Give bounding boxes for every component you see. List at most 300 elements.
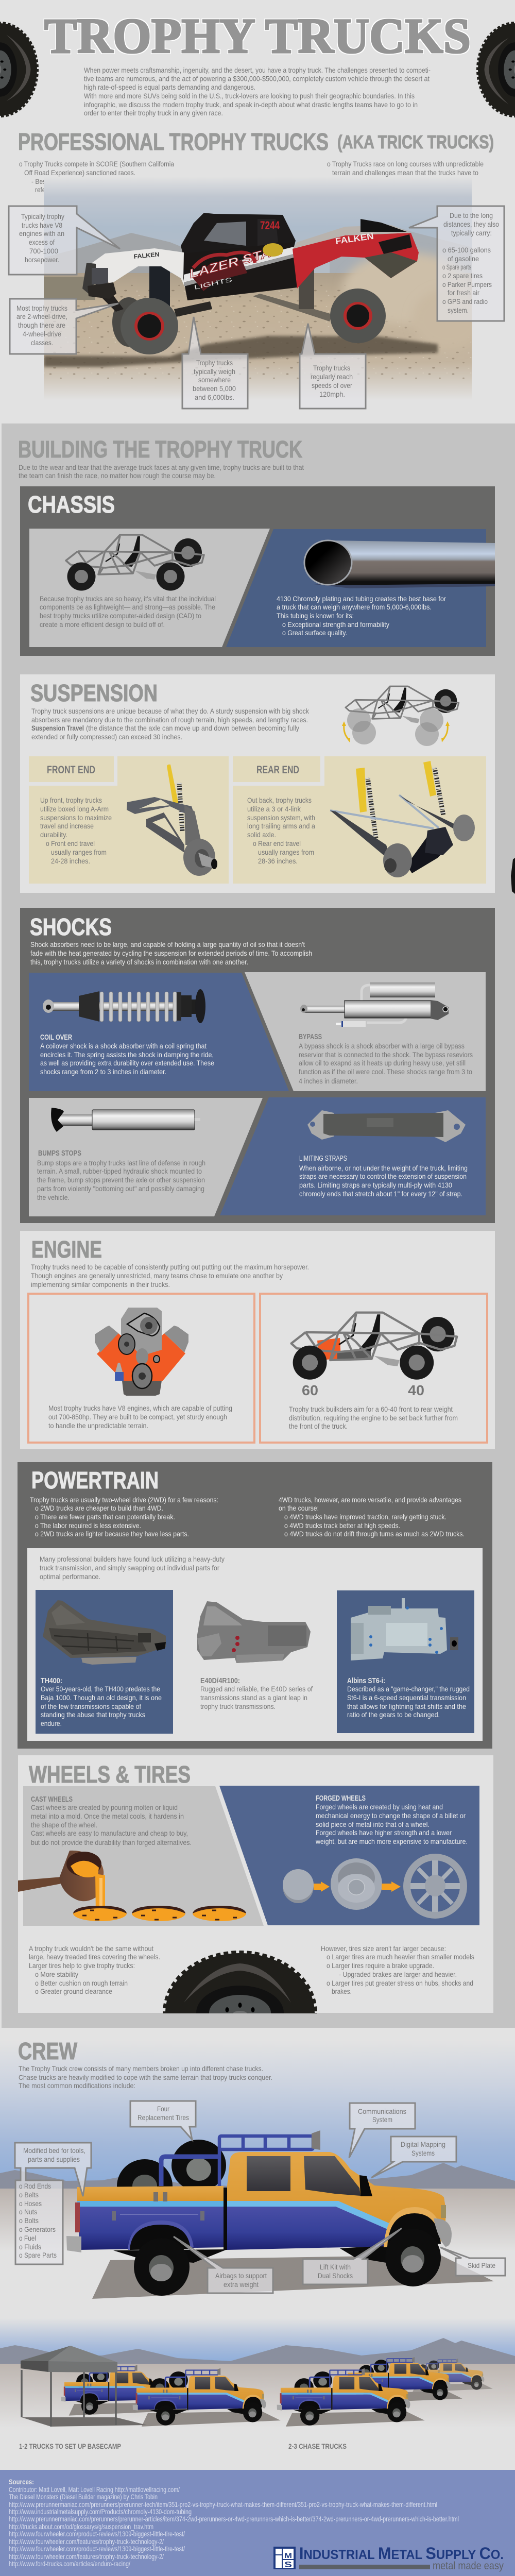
heading: suspension: SUSPENSION — [30, 680, 158, 706]
text: coil over: COIL OVER — [40, 1033, 72, 1042]
text: tubing — [277, 595, 446, 637]
text: sources: http://www.fourwheeler.com/features/trophy-truck-technology-2/ — [9, 2552, 164, 2561]
callout: lift kit — [303, 2228, 402, 2284]
heading: chassis: CHASSIS — [28, 491, 115, 518]
callout: airbags: extra weight — [224, 2280, 259, 2289]
text: albins: St6-I is a 6-speed sequential transmission — [347, 1693, 466, 1702]
text: intro — [84, 66, 431, 117]
text: engine intro: implementing similar components in their trucks. — [31, 1280, 170, 1289]
callout: modified bed: o Belts — [19, 2191, 39, 2199]
icon: e40d transmission — [197, 1601, 311, 1663]
callout: engine: engines with an — [19, 229, 64, 238]
text: bump stops: BUMPS STOPS — [38, 1149, 81, 1158]
text: sources: http://www.ford-trucks.com/articles/enduro-racing/ — [9, 2560, 130, 2568]
text: tires right: - Upgraded brakes are larger and heavier. — [339, 1970, 457, 1978]
icon: rear suspension — [330, 761, 475, 877]
text: crew intro: The most common modifications include: — [19, 2081, 135, 2090]
text: 2wd: o 2WD trucks are cheaper to build than 4WD. — [35, 1504, 163, 1512]
panel: wheels and tires — [18, 1755, 493, 2013]
icon: buggy with suspension travel — [342, 686, 459, 746]
card: th400 — [36, 1590, 173, 1734]
text: tires left: o More stability — [35, 1970, 78, 1978]
text: bypass: A bypass shock is a shock absorber with a large oil bypass — [299, 1042, 465, 1050]
text: sources: Contributor: Matt Lovell, Matt Lovell Racing http://mattlovellracing.com/ — [9, 2485, 180, 2494]
text: shocks intro — [30, 940, 312, 966]
text: forged wheels: mechanical energy to change the shape of a billet or — [316, 1811, 466, 1820]
icon: buggy with engine — [291, 1313, 457, 1380]
icon: right tire — [478, 23, 515, 116]
text: th400: Baja 1000. Though an old design, it is one — [41, 1693, 162, 1702]
callout: long distance supplies: system. — [448, 306, 469, 314]
logo: industrial metal supply: metal made easy — [433, 2560, 504, 2572]
text: th400: of the few transmissions capable of — [41, 1702, 141, 1710]
text: rear end: solid axle. — [247, 831, 276, 839]
text: tubing: o Exceptional strength and formability — [282, 620, 389, 629]
text: 2wd: o The labor required is less extensive. — [35, 1521, 141, 1530]
text: sources: Sources: — [9, 2478, 34, 2486]
callout: airbags — [174, 2236, 273, 2293]
callout: weight: somewhere — [198, 376, 231, 384]
heading: shocks: SHOCKS — [30, 913, 112, 940]
callout: modified bed — [15, 2143, 91, 2264]
text: shocks intro: Shock absorbers need to be large, and capable of holding a large quantity of oil so that it doesn't — [30, 940, 305, 948]
card: limiting straps — [220, 1097, 486, 1215]
text: tires left: Larger tires help to give trophy trucks: — [29, 1961, 135, 1970]
callout: digital mapping — [371, 2137, 456, 2178]
text: cast wheels: the shape of the wheel. — [31, 1821, 97, 1829]
text: 4wd: o 4WD trucks do not drift through turns as much as 2WD trucks. — [284, 1530, 465, 1538]
text: front end — [40, 796, 112, 865]
text: left bullets: - Best in the Desert Off-Road Racing Association — [31, 177, 166, 185]
callout: modified bed: parts and supplies — [28, 2155, 80, 2163]
text: design — [40, 595, 216, 629]
callout: drive — [10, 299, 118, 354]
text: tubing: 4130 Chromoly plating and tubing creates the best base for — [277, 595, 446, 603]
logo: industrial metal supply: M — [284, 2551, 292, 2560]
text: design: Because trophy trucks are so heavy, it's vital that the individual — [40, 595, 216, 603]
text: suspension intro — [31, 707, 310, 741]
callout: speed: speeds of over — [312, 381, 352, 389]
card: coil over — [29, 973, 289, 1091]
callout: long distance supplies: Due to the long — [450, 211, 493, 219]
icon: limiting strap — [307, 1110, 466, 1142]
text: forged wheels: weight, but are much more expensive to manufacture. — [315, 1837, 468, 1845]
text: bypass: function as if the oil were cool. These shocks range from 3 to — [299, 1067, 472, 1076]
callout: lift kit: Lift Kit with — [320, 2263, 351, 2271]
icon: coil over shock — [43, 989, 205, 1023]
text: 4wd: 4WD trucks, however, are more versatile, and provide advantages — [279, 1496, 461, 1504]
text: suspension intro: Trophy truck suspensions are unique because of what they do. A sturdy suspension with big shock — [31, 707, 310, 715]
text: sources: http://www.fourwheeler.com/product-reviews/1309-biggest-little-tire-test/ — [9, 2545, 185, 2553]
illustration: basecamp truck — [133, 2368, 281, 2427]
text: bump stops: terrain. A small, rubber-tipped hydraulic shock mounted to — [37, 1167, 202, 1175]
text: albins: Albins ST6-i: — [347, 1676, 385, 1685]
illustration: basecamp tent — [21, 2346, 147, 2427]
illustration: basecamp truck behind tent — [61, 2365, 190, 2416]
callout: drive: Most trophy trucks — [16, 304, 67, 312]
card: forged wheels — [219, 1786, 479, 1925]
text: bump stops — [37, 1149, 205, 1201]
text: weight distribution: distribution, requiring the engine to be set back further from — [289, 1414, 458, 1422]
callout: long distance supplies: o Parker Pumpers — [442, 280, 492, 289]
card: v8 engine — [28, 1294, 254, 1443]
header: title and intro — [0, 8, 515, 117]
callout: airbags: Airbags to support — [215, 2272, 267, 2280]
text: shocks intro: this, trophy trucks utilize a variety of shocks in combination with one another. — [30, 958, 248, 966]
text: intro: When power meets craftsmanship, ingenuity, and the desert, you have a trophy truck. The challenges presented to competi- — [84, 66, 431, 74]
text: cast wheels: CAST WHEELS — [31, 1795, 73, 1804]
icon: wheel molds — [73, 1906, 246, 1921]
callout: long distance supplies: typically carry: — [451, 229, 492, 237]
callout: drive: classes. — [31, 338, 53, 347]
text: right bullets: o Trophy Trucks race on long courses with unpredictable — [327, 160, 484, 168]
text: tires left — [29, 1944, 160, 1995]
text: bump stops: the vehicle. — [37, 1193, 70, 1201]
label: 60: 60 — [302, 1382, 318, 1398]
text: bypass: BYPASS — [299, 1032, 322, 1041]
text: v8 engine: to handle the unpredictable terrain. — [48, 1421, 148, 1430]
text: front end: suspensions to maximize — [40, 814, 112, 822]
panel: powertrain — [18, 1462, 492, 1749]
text: rear end — [247, 796, 315, 865]
heading: powertrain: POWERTRAIN — [31, 1467, 159, 1494]
heading: front end: FRONT END — [47, 764, 95, 776]
text: bypass: allow oil to exapnd as it heats up during heavy use, yet still — [299, 1059, 466, 1067]
text: forged wheels: Forged wheels are created by using heat and — [316, 1803, 443, 1811]
text: right bullets: built to stand up to any challenge. — [332, 177, 428, 185]
text: shocks intro: fade with the heat generated by cycling the suspension for extended periods of time. To accomplish — [30, 949, 312, 957]
icon: half tire — [163, 1951, 317, 2013]
callout: long distance supplies: distances, they also — [443, 220, 499, 228]
text: v8 engine — [48, 1404, 232, 1430]
heading: building the trophy truck: the team can finish the race, no matter how rough the course may be. — [19, 471, 216, 480]
text: forged wheels: Forged wheels have higher strength and a lower — [316, 1828, 452, 1837]
text: intro: high rate-of-speed is equal parts demanding and dangerous. — [84, 83, 255, 91]
card: e40d — [197, 1601, 313, 1710]
illustration: chase truck near — [277, 2368, 425, 2427]
text: 4wd: o 4WD trucks have improved traction, rarely getting stuck. — [284, 1513, 447, 1521]
icon: bump stop — [51, 1108, 200, 1132]
text: tubing: o Great surface quality. — [282, 629, 347, 637]
text: left bullets: Off Road Experience) sanctioned races. — [24, 168, 135, 177]
callout: engine: excess of — [29, 238, 55, 246]
text: cast wheels: Cast wheels are easy to manufacture and cheap to buy, — [31, 1829, 188, 1837]
text: crew intro: Chase trucks are heavily modified to cope with the same terrain that tropy trucks conquer. — [19, 2073, 272, 2081]
callout: digital mapping: Systems — [411, 2149, 435, 2157]
callout: skid plate — [440, 2247, 505, 2276]
text: rear end: 28-36 inches. — [258, 857, 298, 865]
text: th400: TH400: — [41, 1676, 62, 1685]
text: engine intro — [31, 1263, 309, 1289]
text: sources — [9, 2478, 459, 2568]
heading: building the trophy truck: BUILDING THE TROPHY TRUCK — [18, 436, 302, 463]
text: weight distribution: the front of the truck. — [289, 1422, 348, 1430]
heading: professional trophy trucks: PROFESSIONAL TROPHY TRUCKS — [18, 128, 329, 155]
callout: modified bed: o Hoses — [19, 2199, 42, 2208]
text: albins: ratio of the gears to be changed. — [347, 1710, 440, 1719]
card: albins — [337, 1590, 474, 1733]
text: suspension intro: absorbers are mandatory due to the combination of rough terrain, high speeds, and lengthy races. — [31, 716, 308, 724]
text: th400: standing the abuse that trophy trucks — [41, 1710, 145, 1719]
icon: left tire — [0, 23, 37, 116]
text: rear end: utilize a 3 or 4-link — [247, 805, 301, 813]
text: right bullets: terrain and challenges mean that the trucks have to — [332, 168, 478, 177]
callout: modified bed: o Fuel — [19, 2234, 36, 2242]
logo: industrial metal supply — [273, 2544, 504, 2572]
text: rear end: o Rear end travel — [253, 839, 301, 848]
text: albins: Described as a "game-changer," the rugged — [347, 1685, 470, 1693]
text: right bullets — [327, 160, 484, 185]
text: intro: tive teams are numerous, and the act of powering a $300,000-$500,000, completely custom vehicle through the desert at — [84, 74, 430, 82]
text: 2wd: Trophy trucks are usually two-wheel drive (2WD) for a few reasons: — [30, 1496, 218, 1504]
icon: front suspension — [127, 765, 217, 876]
panel: shocks — [20, 908, 495, 1223]
callout: modified bed: o Generators — [19, 2225, 56, 2233]
text: 2wd: o 2WD trucks are lighter because they have less parts. — [35, 1530, 189, 1538]
text: left bullets: o Trophy Trucks compete in SCORE (Southern California — [19, 160, 174, 168]
sub-panel: rear end — [233, 756, 486, 884]
callout: engine: horsepower. — [25, 256, 59, 264]
text: transmissions intro: Many professional builders have found luck utilizing a heavy-duty — [40, 1555, 225, 1563]
text: weight distribution — [289, 1405, 458, 1430]
callout: communications: System — [372, 2115, 392, 2124]
callout: speed: 120mph. — [319, 390, 345, 398]
callout: long distance supplies: for fresh air — [448, 289, 479, 297]
text: limiting straps: LIMITING STRAPS — [299, 1154, 347, 1163]
text: tires left: o Better cushion on rough terrain — [35, 1979, 128, 1987]
callout: long distance supplies: o 65-100 gallons — [442, 246, 491, 254]
panel: transmissions — [27, 1548, 483, 1741]
callout: drive: 4-wheel-drive — [23, 330, 61, 338]
text: tubing: This tubing is known for its: — [277, 612, 354, 620]
heading: crew: CREW — [18, 2038, 77, 2064]
callout: engine: 700-1000 — [29, 247, 58, 255]
icon: albins transmission — [351, 1598, 458, 1660]
callout: skid plate: Skid Plate — [468, 2261, 495, 2269]
icon: cropped truck at right edge — [511, 858, 515, 894]
text: sources: http://www.fourwheeler.com/features/trophy-truck-technology-2/ — [9, 2537, 164, 2546]
text: front end: durability. — [40, 831, 67, 839]
text: tires right: brakes. — [332, 1987, 352, 1995]
text: coil over: shocks range from 2 to 3 inches in diameter. — [40, 1067, 166, 1076]
text: bump stops: Bump stops are a trophy trucks last line of defense in rough — [37, 1159, 205, 1167]
callout: communications — [349, 2103, 415, 2158]
logo: industrial metal supply: INDUSTRIAL METAL SUPPLY CO. — [299, 2544, 504, 2563]
text: tubing: a truck that can weigh anywhere from 5,000-6,000lbs. — [277, 603, 432, 611]
text: crew intro — [19, 2064, 272, 2090]
text: design: best trophy trucks utilize computer-aided design (CAD) to — [40, 612, 201, 620]
callout: speed — [300, 324, 366, 409]
callout: speed: Trophy trucks — [313, 364, 350, 372]
callout: lift kit: Dual Shocks — [318, 2272, 353, 2280]
text: sources: The Diesel Monsters (Diesel Builder magazine) by Chris Tobin — [9, 2493, 158, 2501]
text: front end: o Front end travel — [46, 839, 95, 848]
icon: buggy chassis — [66, 535, 204, 590]
callout: communications: Communications — [358, 2107, 406, 2115]
scene: chase truck backdrop — [0, 2028, 515, 2251]
callout: long distance supplies — [409, 206, 504, 321]
text: cast wheels — [31, 1795, 192, 1846]
panel: engine — [20, 1231, 495, 1449]
title: TROPHY TRUCKS — [44, 8, 471, 63]
text: intro: order to enter their trophy truck in any given race. — [84, 109, 223, 117]
icon: crucible pouring molten metal — [18, 1851, 105, 1914]
text: e40d: transmissions stand as a giant leap in — [200, 1693, 307, 1702]
text: suspension intro: extended or fully compressed) can exceed 30 inches. — [31, 733, 182, 741]
text: intro: infographic, we discuss the modern trophy truck, and speak in-depth about what drastic lengths teams have to go to in — [84, 100, 418, 109]
text: e40d: E40D/4R100: — [200, 1676, 240, 1685]
text: e40d: Rugged and reliable, the E40D series of — [200, 1685, 313, 1693]
text: 2wd: o There are fewer parts that can potentially break. — [35, 1513, 175, 1521]
text: bypass: reservior that is connected to the shock. The bypass reseviors — [299, 1050, 473, 1059]
sub-panel: tubing — [226, 529, 486, 647]
text: cast wheels: metal into a mold. Once the metal cools, it hardens in — [31, 1812, 184, 1820]
callout: engine — [9, 206, 120, 275]
heading: building the trophy truck — [18, 436, 304, 480]
text: th400: endure. — [41, 1719, 62, 1727]
text: rear end: usually ranges from — [258, 848, 314, 856]
text: coil over: encircles it. The spring assists the shock in damping the ride, — [40, 1050, 214, 1059]
text: albins — [347, 1676, 470, 1719]
text: bypass: 4 inches in diameter. — [299, 1077, 358, 1085]
text: th400: Over 50-years-old, the TH400 predates the — [41, 1685, 160, 1693]
text: sources: http://trucks.about.com/od/glossarys/g/suspension_trav.htm — [9, 2522, 153, 2531]
text: design: components be as lightweight— and strong—as possible. The — [40, 603, 215, 611]
text: tires right: o Larger tires require a brake upgrade. — [327, 1961, 434, 1970]
text: rear end: Out back, trophy trucks — [247, 796, 312, 804]
text: front end: 24-28 inches. — [51, 857, 90, 865]
text: front end: usually ranges from — [51, 848, 107, 856]
heading: rear end: REAR END — [256, 764, 299, 776]
text: limiting straps: straps are necessary to control the extension of suspension — [299, 1172, 467, 1180]
callout: modified bed: o Fluids — [19, 2243, 41, 2251]
text: limiting straps — [299, 1154, 468, 1198]
text: front end: Up front, trophy trucks — [40, 796, 102, 804]
callout: weight: between 5,000 — [193, 384, 236, 393]
callout: modified bed: o Bolts — [19, 2216, 39, 2225]
card: bypass — [245, 972, 486, 1091]
gray band: building the trophy truck — [2, 423, 515, 2028]
text: tires right — [321, 1944, 474, 1995]
text: bump stops: parts from violently "bottoming out" and possibly damaging — [37, 1184, 204, 1193]
callout: weight — [182, 317, 248, 409]
icon: billet to wheel sequence — [283, 1854, 467, 1919]
section: crew — [0, 2028, 515, 2450]
section: professional trophy trucks — [9, 128, 504, 409]
callout: digital mapping: Digital Mapping — [401, 2140, 445, 2148]
callout: speed: regularly reach — [311, 372, 353, 381]
text: limiting straps: When airborne, or not under the weight of the truck, limiting — [299, 1164, 468, 1172]
text: e40d — [200, 1676, 313, 1710]
callout: long distance supplies: o 2 spare tires — [442, 272, 483, 280]
illustration: chase truck far — [407, 2359, 493, 2392]
text: albins: that allows for lightning fast shifts and the — [347, 1702, 466, 1710]
photo: racing trophy truck: LIGHTS — [194, 276, 233, 291]
photo: racing trophy truck — [44, 177, 484, 400]
text: suspension intro: (the distance that the axle can move up and down between becoming fully — [86, 724, 299, 732]
text: coil over: A coilover shock is a shock absorber with a coil spring that — [40, 1042, 207, 1050]
callout: drive: though there are — [18, 321, 65, 329]
text: coil over — [40, 1033, 214, 1076]
card: bump stops — [29, 1098, 263, 1216]
footer: sources and logo — [0, 2470, 515, 2576]
text: v8 engine: out 700-850hp. They are built to be compact, yet sturdy enough — [48, 1413, 227, 1421]
text: forged wheels: solid piece of metal into that of a wheel. — [316, 1820, 430, 1828]
callout: replacement tires: Four — [157, 2105, 169, 2113]
text: cast wheels: Cast wheels are created by pouring molten or liquid — [31, 1803, 178, 1811]
text: tires left: large, heavy treaded tires covering the wheels. — [29, 1953, 160, 1961]
panel: suspension — [20, 674, 495, 893]
text: bump stops: the frame, bump stops prevent the axle or other suspension — [37, 1176, 205, 1184]
callout: engine: Typically trophy — [21, 212, 64, 221]
heading: building the trophy truck: Due to the wear and tear that the average truck faces at any given time, trophy trucks are built to that — [19, 463, 304, 471]
photo: racing trophy truck: LAZER STAR — [188, 243, 284, 281]
callout: long distance supplies: o Spare parts — [442, 263, 471, 271]
text: 2wd — [30, 1496, 218, 1538]
text: transmissions intro — [40, 1555, 225, 1581]
callout: replacement tires — [130, 2101, 196, 2140]
photo: racing trophy truck: FALKEN — [335, 231, 374, 246]
text: cast wheels: but do not provide the durability than forged alternatives. — [31, 1838, 192, 1846]
heading: wheels and tires: WHEELS & TIRES — [29, 1761, 191, 1788]
icon: v8 engine — [95, 1308, 188, 1396]
panel: chassis — [20, 486, 495, 656]
text: front end: travel and increase — [40, 822, 94, 830]
label: chase trucks: 2-3 CHASE TRUCKS — [288, 2442, 347, 2450]
text: limiting straps: parts. Limiting straps are typically multi-ply with 4130 — [299, 1181, 452, 1189]
photo: racing trophy truck: 7244 — [260, 219, 280, 232]
text: sources: http://www.fourwheeler.com/product-reviews/1309-biggest-little-tire-test/ — [9, 2530, 185, 2538]
illustration: chase truck middle — [345, 2357, 462, 2403]
callout: engine: trucks have V8 — [22, 221, 62, 229]
label: 40: 40 — [408, 1382, 424, 1398]
callout: modified bed: Modified bed for tools, — [23, 2146, 85, 2155]
callout: replacement tires: Replacement Tires — [138, 2113, 189, 2122]
callout: weight: Trophy trucks — [196, 359, 233, 367]
icon: chromoly tube — [304, 540, 495, 588]
callout: long distance supplies: of gasoline — [448, 255, 479, 263]
photo: racing trophy truck: FALKEN — [133, 251, 160, 260]
text: 4wd — [279, 1496, 465, 1538]
callout: drive: are 2-wheel-drive, — [16, 312, 67, 320]
heading: engine: ENGINE — [31, 1236, 102, 1263]
callout: weight: typically weigh — [194, 367, 235, 376]
icon: bypass shock — [300, 982, 449, 1027]
icon: th400 transmission — [43, 1600, 166, 1665]
text: intro: With more and more SUVs being sold in the U.S., truck-lovers are looking to push their geographic boundaries. In this — [84, 92, 415, 100]
text: forged wheels: FORGED WHEELS — [316, 1794, 366, 1803]
label: basecamp trucks: 1-2 TRUCKS TO SET UP BASECAMP — [19, 2442, 121, 2450]
sub-panel: design — [29, 529, 270, 647]
text: forged wheels — [315, 1794, 468, 1845]
text: e40d: trophy truck transmissions. — [200, 1702, 276, 1710]
callout: weight: and 6,000lbs. — [195, 393, 234, 401]
text: transmissions intro: optimal performance. — [40, 1572, 100, 1581]
sub-panel: front end — [29, 756, 229, 884]
text: v8 engine: Most trophy trucks have V8 engines, which are capable of putting — [48, 1404, 232, 1412]
callout: modified bed: o Nuts — [19, 2208, 37, 2216]
text: transmissions intro: truck transmission, and simply swapping out individual parts for — [40, 1564, 219, 1572]
card: cast wheels — [18, 1786, 264, 1926]
text: left bullets: refers to the trucks as "Trick Trucks." — [35, 185, 134, 194]
text: 4wd: on the course: — [279, 1504, 319, 1512]
illustration: chase truck — [66, 2130, 494, 2299]
text: bypass — [299, 1032, 473, 1085]
text: coil over: as well as providing extra durability over extended use. These — [40, 1059, 214, 1067]
text: tires right: o Larger tires put greater stress on hubs, shocks and — [327, 1979, 473, 1987]
text: 4wd: o 4WD trucks track better at high speeds. — [284, 1521, 400, 1530]
logo: industrial metal supply: S — [284, 2561, 292, 2569]
